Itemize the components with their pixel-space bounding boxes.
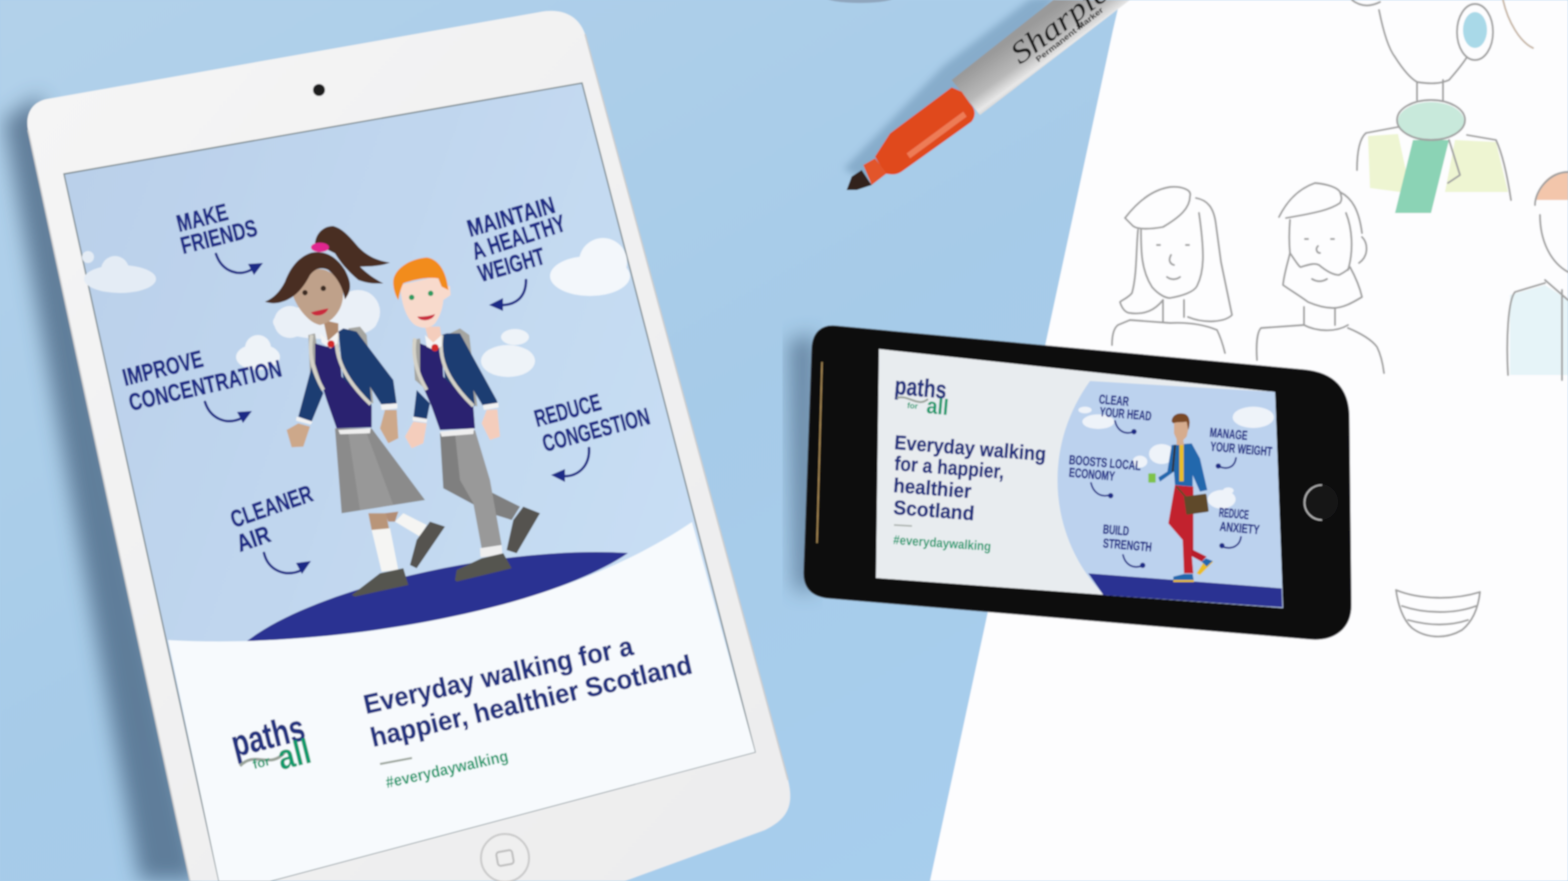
top edge object (825, 0, 895, 3)
phone shadow (790, 335, 815, 590)
walking man figure (1148, 413, 1213, 582)
girl hair (265, 252, 350, 303)
boy left hand (405, 422, 427, 448)
pen small print: Permanent Marker (1034, 6, 1105, 64)
phone labels: BUILD (1102, 521, 1130, 539)
phone headline: Everyday walking (894, 432, 1047, 466)
pencil sketch: woman with scarf and headphones (1352, 0, 1533, 213)
boy eyes and mouth (409, 295, 414, 300)
label: improve concentration (120, 346, 284, 423)
girl skirt (335, 428, 425, 513)
phone headline: for a happier, (894, 453, 1005, 484)
phone labels: MANAGE (1209, 425, 1248, 443)
label: maintain a healthy weight: A HEALTHY (469, 210, 569, 266)
boy left sleeve (413, 390, 430, 420)
phone labels: STRENGTH (1102, 535, 1153, 555)
tablet headline: Everyday walking for a (361, 631, 637, 720)
pen body (952, 0, 1130, 115)
girl right hand (380, 410, 398, 443)
boy backpack (413, 328, 477, 407)
label: maintain a healthy weight: WEIGHT (475, 243, 548, 288)
pen shadow (844, 0, 1057, 182)
gold edge (817, 362, 822, 543)
girl backpack straps (311, 333, 371, 404)
label: cleaner air: AIR (233, 521, 274, 558)
label: reduce congestion: REDUCE (532, 389, 604, 433)
pencil sketch: woman (1112, 187, 1232, 353)
tablet body (27, 11, 790, 881)
phone labels: CLEAR (1098, 391, 1130, 409)
white sketch paper (930, 0, 1568, 881)
phone body (804, 326, 1351, 639)
boy front shoe (455, 553, 512, 582)
phone labels: BOOSTS LOCAL (1068, 452, 1141, 473)
phone logo: paths for all: for (907, 401, 918, 411)
man torso (1158, 443, 1207, 492)
tablet logo: paths for all (227, 707, 315, 778)
tablet logo: paths for all: for (251, 753, 272, 772)
pencil sketch: man at right edge (1507, 172, 1568, 380)
phone hashtag: #everydaywalking (893, 532, 992, 554)
phone logo: paths for all (893, 372, 950, 420)
label: maintain a healthy weight (464, 192, 569, 311)
boy back shoe (507, 507, 540, 553)
label: make friends: FRIENDS (178, 215, 260, 260)
camera (313, 84, 325, 96)
phone logo: paths for all: paths (893, 372, 948, 405)
tablet hashtag: #everydaywalking (384, 748, 510, 792)
phone in hand (1148, 473, 1156, 483)
phone clouds (1078, 407, 1274, 509)
pencil sketch: mask (1396, 590, 1480, 637)
pen cap (875, 87, 975, 174)
boy right hand (482, 409, 500, 440)
boy head (400, 277, 451, 328)
phone navy ground (1088, 573, 1282, 607)
phone logo: paths for all: all (926, 393, 950, 420)
pencil sketch: bearded man (1257, 183, 1384, 373)
girl back leg (385, 512, 398, 522)
home button (1302, 484, 1338, 520)
schoolgirl (265, 226, 445, 597)
label: reduce congestion (532, 389, 653, 482)
label: make friends: MAKE (174, 199, 231, 238)
girl backpack (308, 327, 373, 403)
girl near leg (368, 513, 389, 530)
phone divider (894, 525, 912, 526)
tablet divider (380, 758, 412, 764)
man front leg (1168, 485, 1193, 573)
man back leg (1183, 490, 1207, 562)
schoolboy (393, 257, 540, 582)
tablet screen (64, 83, 755, 881)
tablet headline: happier, healthier Scotland (368, 650, 695, 753)
tablet logo: paths for all: all (274, 732, 315, 778)
label: reduce congestion: CONGESTION (540, 403, 653, 458)
phone labels: YOUR WEIGHT (1210, 439, 1273, 459)
white footer area (168, 522, 755, 881)
man head (1174, 420, 1190, 445)
navy hill (247, 552, 628, 641)
marker pen (844, 0, 1130, 190)
girl left hand (287, 423, 310, 447)
pen tip (847, 170, 872, 190)
label: cleaner air (227, 480, 316, 574)
boy front trouser leg (455, 430, 502, 548)
phone (790, 326, 1351, 639)
girl eyes and mouth (302, 290, 308, 295)
phone sky panel (1057, 381, 1283, 608)
girl ponytail (315, 226, 390, 284)
phone labels (1068, 391, 1273, 568)
phone headline: healthier (893, 475, 972, 503)
label: improve concentration: CONCENTRATION (126, 355, 284, 417)
boy hair (393, 257, 448, 300)
phone labels: REDUCE (1218, 505, 1250, 522)
phone labels: ANXIETY (1219, 519, 1260, 537)
label: maintain a healthy weight: MAINTAIN (464, 192, 558, 243)
girl jacket and right sleeve (338, 328, 397, 407)
tablet (4, 11, 790, 881)
clouds (82, 238, 630, 377)
label: cleaner air: CLEANER (227, 480, 316, 534)
phone headline: Scotland (893, 497, 975, 525)
boy jacket and right sleeve (442, 333, 498, 407)
girl head (293, 269, 343, 325)
phone scene (1068, 391, 1282, 607)
phone headline (893, 432, 1047, 525)
girl left sleeve (298, 367, 323, 422)
phone labels: YOUR HEAD (1099, 404, 1152, 424)
pen collar (863, 158, 887, 185)
phone labels: ECONOMY (1068, 465, 1116, 484)
man bag (1184, 494, 1209, 515)
boy vest (420, 343, 475, 430)
man shoe (1173, 574, 1194, 582)
label: make friends (174, 199, 263, 275)
girl scrunchie (311, 243, 329, 252)
boy neck and collar (425, 327, 442, 345)
girl vest (315, 342, 372, 428)
tablet logo: paths for all: paths (227, 707, 309, 765)
girl neck and collar (323, 320, 338, 343)
boy back trouser leg (440, 433, 520, 520)
label: improve concentration: IMPROVE (120, 346, 206, 392)
boy backpack straps (414, 335, 473, 406)
phone screen (876, 349, 1283, 608)
home button (481, 834, 529, 881)
tablet shadow (4, 95, 200, 881)
